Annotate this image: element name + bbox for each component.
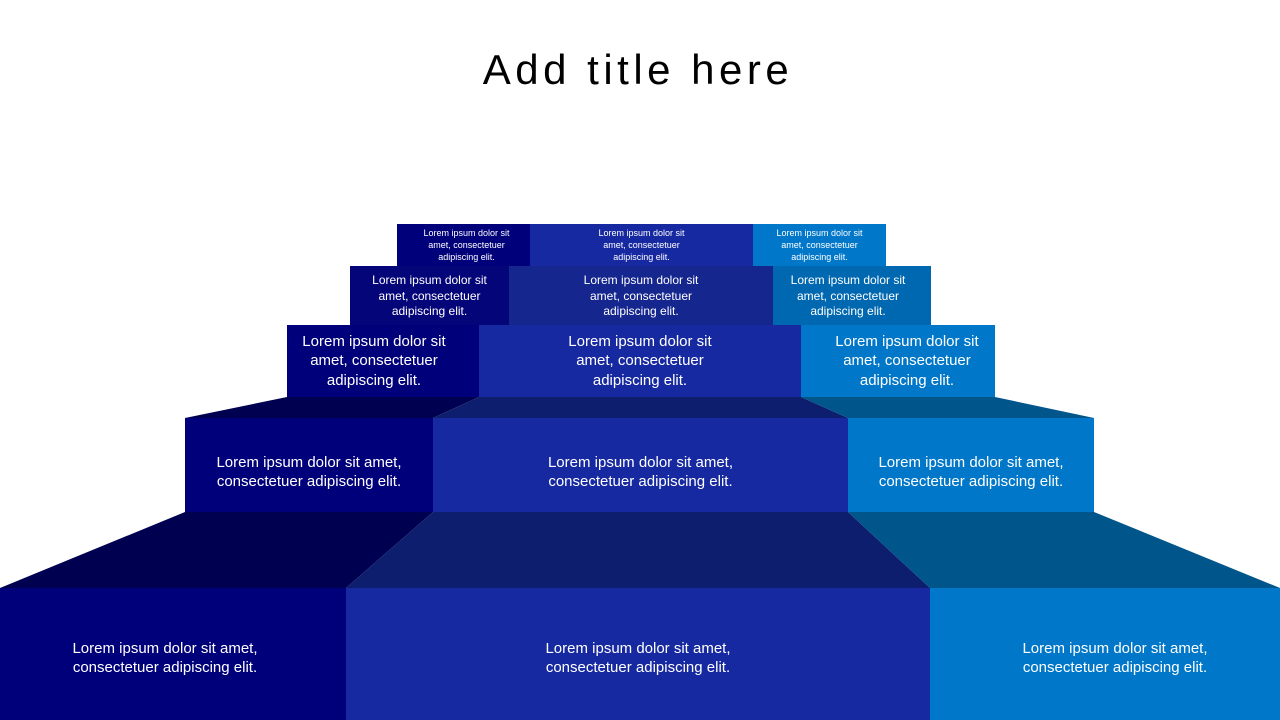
step 3 right: Lorem ipsum dolor sit — [835, 333, 979, 350]
step 4 middle: adipiscing elit. — [603, 304, 679, 318]
step 4 left — [350, 266, 509, 325]
step 4 middle: amet, consectetuer — [590, 289, 692, 303]
step 3 middle — [479, 325, 801, 397]
step 4 left: adipiscing elit. — [392, 304, 467, 318]
step 2 left: Lorem ipsum dolor sit amet, — [216, 454, 402, 470]
step 5 right: amet, consectetuer — [781, 240, 858, 250]
step 3 left: Lorem ipsum dolor sit — [302, 333, 446, 350]
step 3 middle: amet, consectetuer — [576, 352, 704, 369]
step 4 middle: Lorem ipsum dolor sit — [584, 273, 698, 287]
step 5 middle: Lorem ipsum dolor sit — [598, 228, 685, 238]
title: Add title here — [483, 46, 793, 93]
step 2 left: consectetuer adipiscing elit. — [217, 473, 401, 490]
step 2 middle — [433, 418, 848, 512]
step 1 left: consectetuer adipiscing elit. — [73, 659, 257, 676]
step 4 right: adipiscing elit. — [810, 304, 886, 318]
step 1 middle: consectetuer adipiscing elit. — [546, 659, 730, 676]
step 3 right: adipiscing elit. — [860, 372, 954, 389]
step 1 left: Lorem ipsum dolor sit amet, — [72, 640, 258, 656]
step 1 right: Lorem ipsum dolor sit amet, — [1022, 640, 1208, 656]
step 1 right: consectetuer adipiscing elit. — [1023, 659, 1207, 676]
step 5 right: adipiscing elit. — [791, 252, 848, 262]
step 5 middle — [530, 224, 753, 266]
step 3 middle: Lorem ipsum dolor sit — [568, 333, 712, 350]
step 5 right: Lorem ipsum dolor sit — [776, 228, 863, 238]
step 3 middle: adipiscing elit. — [593, 372, 687, 389]
step 2 middle: consectetuer adipiscing elit. — [548, 473, 733, 490]
step 1 left — [0, 588, 346, 720]
step 5 left: amet, consectetuer — [428, 240, 505, 250]
step 2 right: Lorem ipsum dolor sit amet, — [878, 454, 1064, 470]
step 4 left: Lorem ipsum dolor sit — [372, 273, 487, 287]
step 1 right — [930, 588, 1280, 720]
step 2 middle: Lorem ipsum dolor sit amet, — [548, 454, 733, 470]
step 4 right: amet, consectetuer — [797, 289, 899, 303]
step 1 middle: Lorem ipsum dolor sit amet, — [545, 640, 731, 656]
step 2 right — [848, 418, 1094, 512]
step 5 middle: amet, consectetuer — [603, 240, 680, 250]
step 5 left: adipiscing elit. — [438, 252, 495, 262]
step 5 left: Lorem ipsum dolor sit — [423, 228, 510, 238]
step 5 left — [397, 224, 530, 266]
step 4 right: Lorem ipsum dolor sit — [791, 273, 905, 287]
step 3 left: adipiscing elit. — [327, 372, 421, 389]
step 5 right — [753, 224, 886, 266]
step 5 middle: adipiscing elit. — [613, 252, 670, 262]
step 3 right: amet, consectetuer — [843, 352, 971, 369]
step 4 left: amet, consectetuer — [378, 289, 481, 303]
step 4 middle — [509, 266, 773, 325]
step 2 right: consectetuer adipiscing elit. — [879, 473, 1063, 490]
step 3 right — [801, 325, 995, 397]
step 1 middle — [346, 588, 930, 720]
step 4 right — [773, 266, 931, 325]
step 2 left — [185, 418, 433, 512]
step 3 left: amet, consectetuer — [310, 352, 438, 369]
step 3 left — [287, 325, 479, 397]
